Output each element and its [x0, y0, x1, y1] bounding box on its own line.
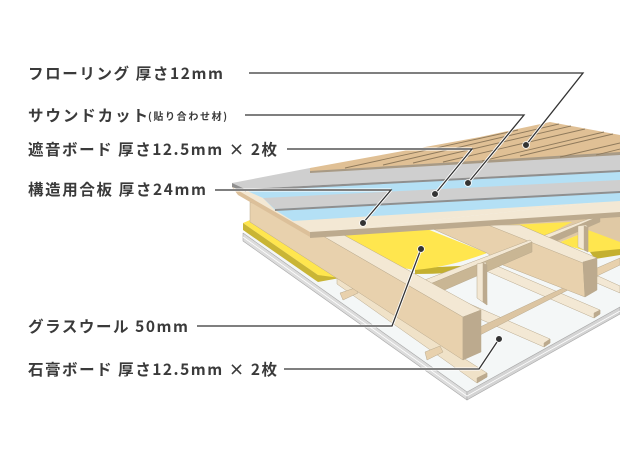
left glass wool strip	[243, 220, 345, 282]
back glass wool	[508, 222, 620, 259]
leader: sound cut	[245, 115, 524, 186]
crossbar and post	[422, 240, 532, 305]
main beam	[250, 202, 481, 360]
leader: glass wool	[197, 246, 424, 326]
gray sound insulation boards	[232, 153, 620, 211]
battens	[337, 258, 620, 383]
label: sound cut	[28, 104, 227, 126]
leader: gypsum board	[284, 336, 502, 369]
back crossbar and post	[540, 216, 600, 252]
ceiling gypsum board	[243, 200, 620, 400]
label: sound cut: (貼り合わせ材)	[148, 108, 227, 123]
joist 2	[431, 225, 597, 297]
central glass wool	[342, 229, 510, 274]
label: glass wool: グラスウール 50mm	[28, 315, 188, 337]
label: sound insulation board: 遮音ボード 厚さ12.5mm × 2枚	[28, 138, 277, 160]
leader: plywood	[215, 190, 391, 226]
blue sound-cut layers	[245, 170, 620, 221]
plywood	[232, 150, 620, 238]
back tan joist side	[490, 212, 620, 243]
leader: flooring	[249, 73, 583, 148]
label: flooring: フローリング 厚さ12mm	[28, 62, 223, 84]
label: gypsum board: 石膏ボード 厚さ12.5mm × 2枚	[28, 358, 277, 380]
label: sound cut: サウンドカット	[28, 104, 148, 126]
illustration: floor cross-section	[232, 122, 620, 400]
label: plywood: 構造用合板 厚さ24mm	[28, 178, 206, 200]
flooring	[310, 122, 620, 173]
leader: sound insulation board	[287, 149, 472, 197]
leader halos	[232, 73, 583, 369]
